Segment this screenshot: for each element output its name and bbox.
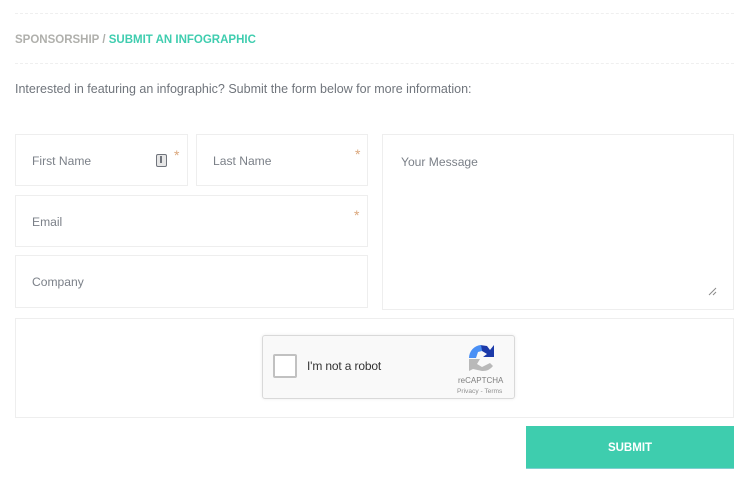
required mark: * (355, 146, 360, 162)
checkbox label: I'm not a robot (307, 359, 381, 373)
intro text: Interested in featuring an infographic? Submit the form below for more information: (15, 82, 472, 96)
field: email: Email (32, 215, 62, 229)
checkbox (273, 354, 297, 378)
submit button (526, 426, 734, 469)
breadcrumb heading: SPONSORSHIP / SUBMIT AN INFOGRAPHIC (15, 34, 256, 46)
required mark: * (174, 147, 179, 163)
field: company: Company (32, 275, 84, 289)
field: last name (196, 134, 368, 186)
recaptcha label: reCAPTCHA (458, 376, 503, 385)
submit button: SUBMIT (608, 442, 652, 454)
field: first name: First Name (32, 154, 91, 168)
icon: contact card (156, 154, 167, 167)
field: message (382, 134, 734, 310)
panel: captcha row (15, 318, 734, 418)
field: email (15, 195, 368, 247)
field: first name (15, 134, 188, 186)
recaptcha widget (262, 335, 515, 399)
field: company (15, 255, 368, 308)
field: last name: Last Name (213, 154, 271, 168)
field: message: Your Message (401, 155, 478, 169)
icon: resize handle (708, 288, 716, 296)
icon: recaptcha logo (469, 345, 494, 371)
required mark: * (354, 207, 359, 223)
privacy and terms links: Privacy - Terms (457, 388, 502, 395)
